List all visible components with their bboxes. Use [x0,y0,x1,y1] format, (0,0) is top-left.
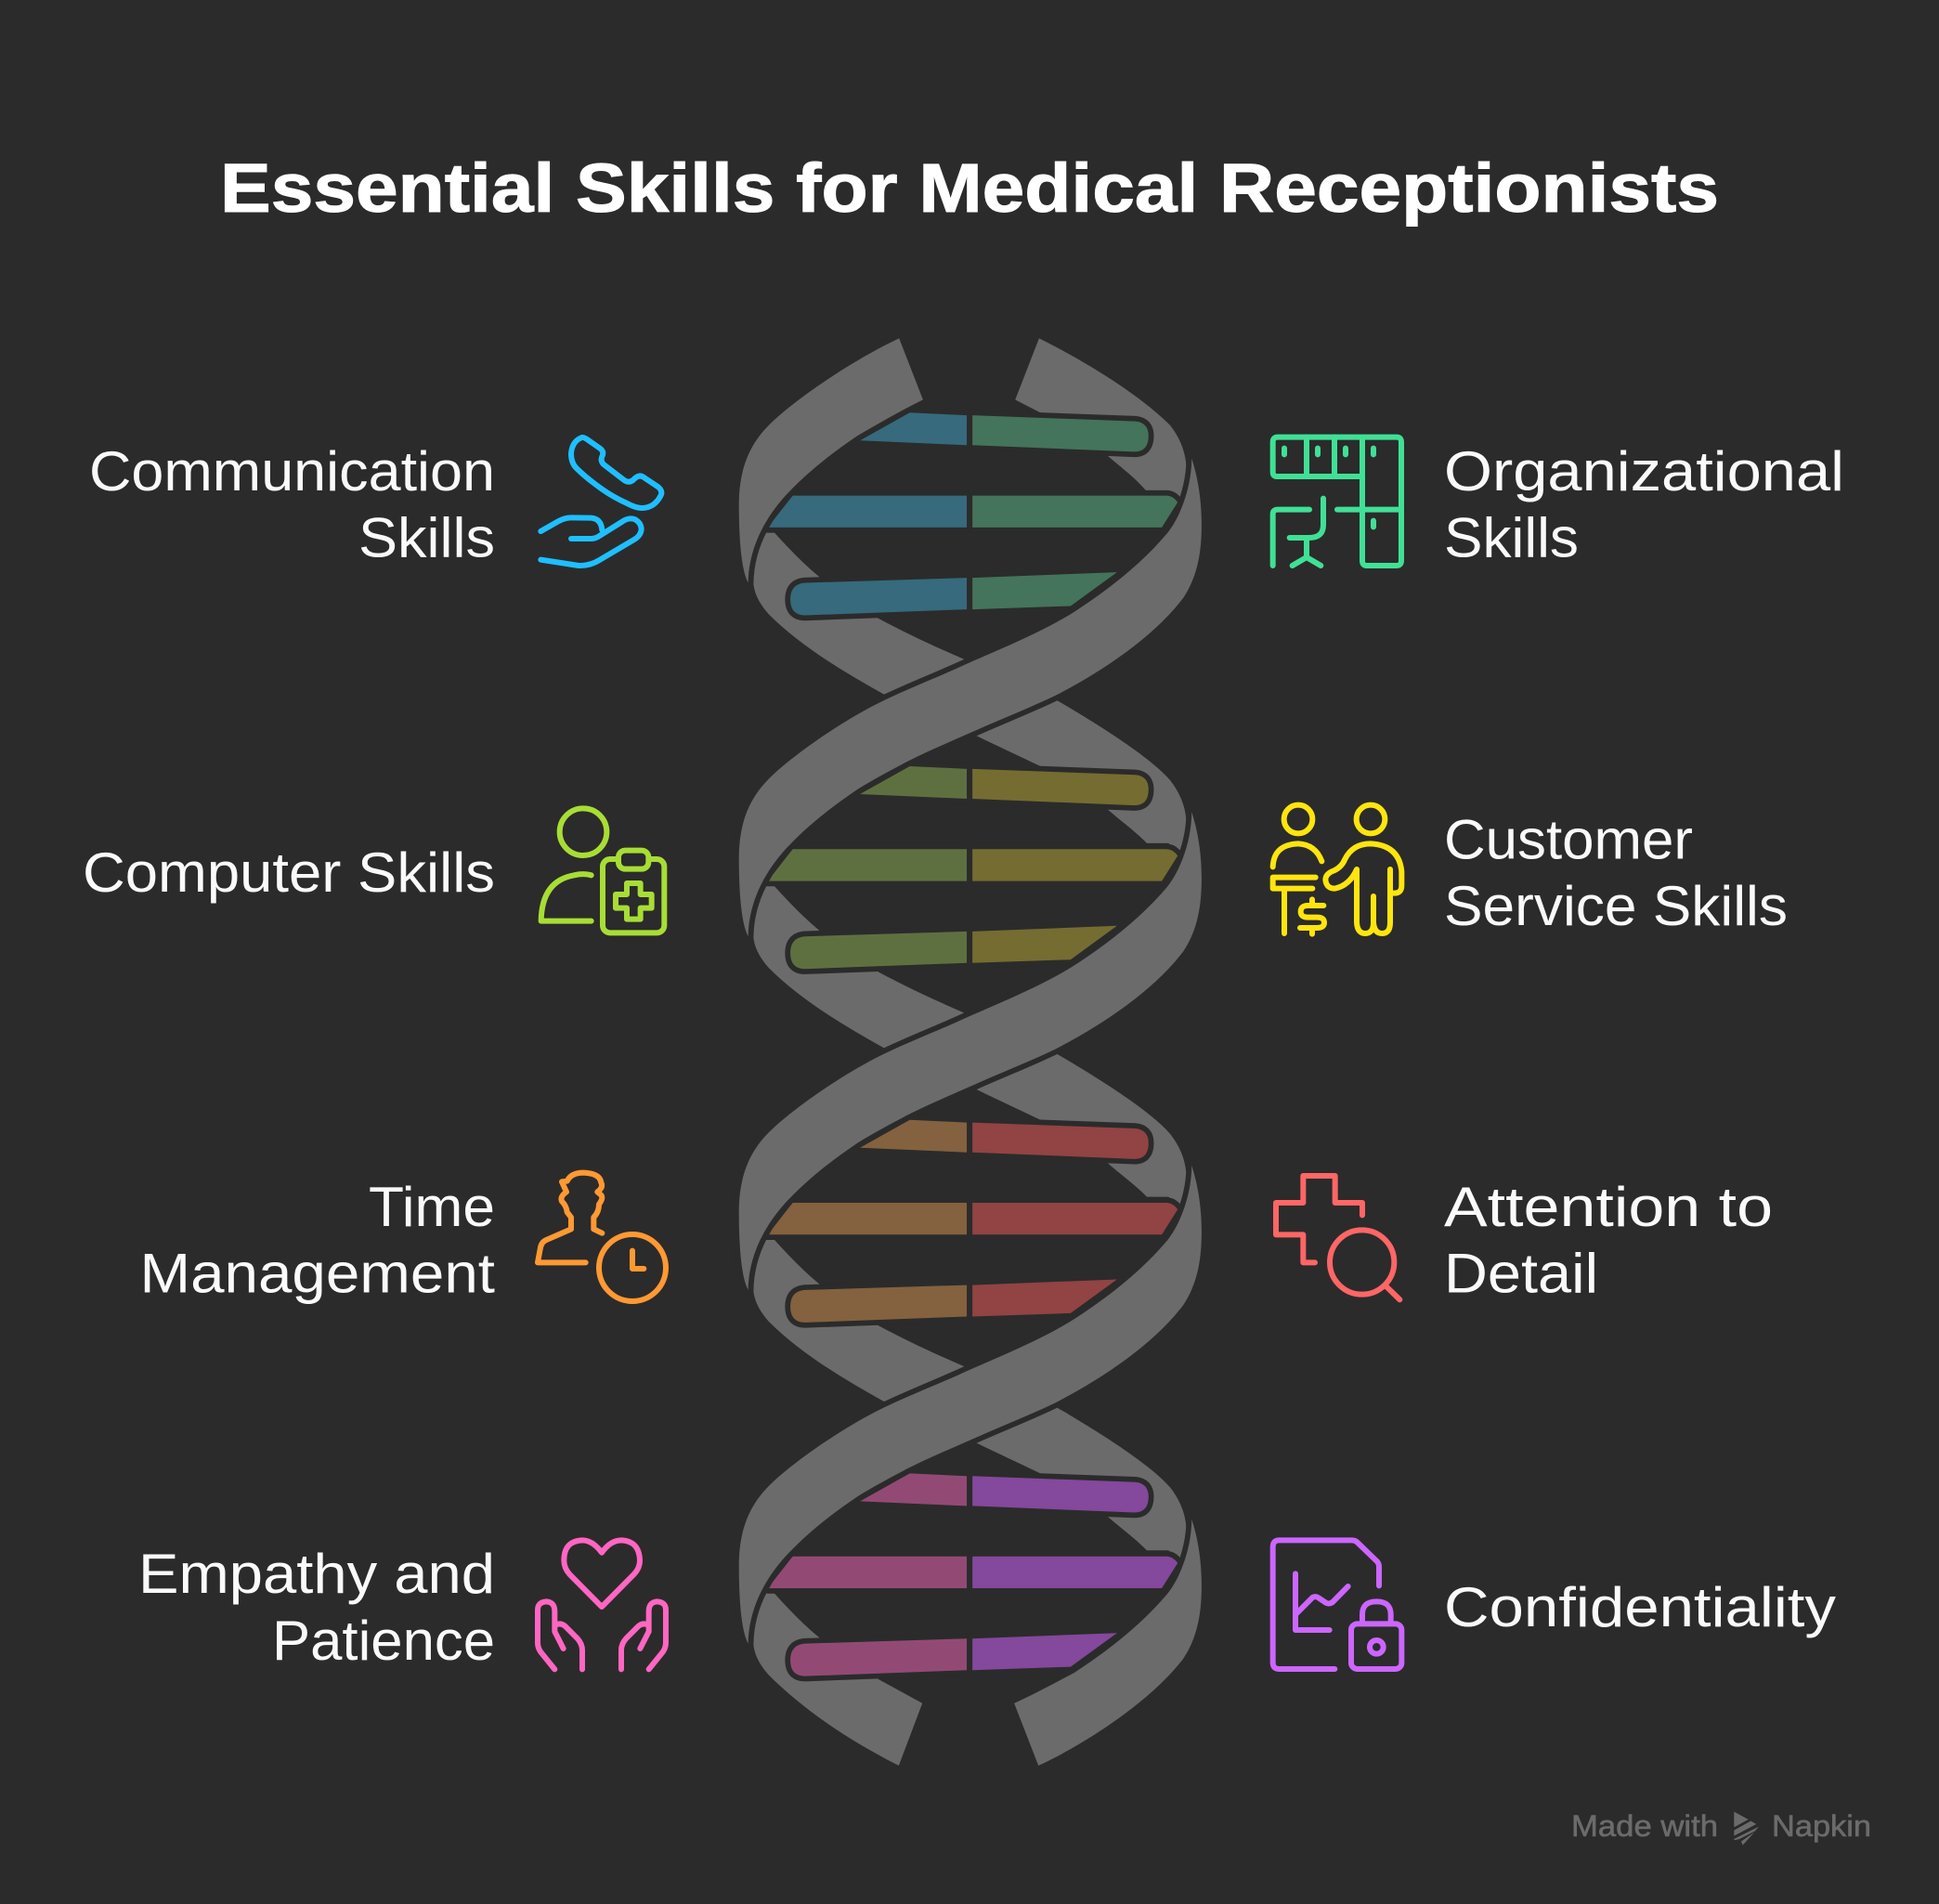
label: confidentiality: Confidentiality [1444,1576,1836,1638]
label: attention to detail: Detail [1444,1243,1598,1304]
back strands [752,338,1187,1766]
icon: office cabinets and chair [1273,437,1401,566]
icon: person with medical clipboard [541,808,664,932]
label: communication skills [89,440,495,568]
watermark: made with napkin: Napkin [1772,1809,1871,1843]
label: communication skills: Skills [358,507,495,568]
label: empathy and patience [138,1543,495,1672]
watermark: made with napkin: Made with [1571,1809,1718,1843]
icon: hands holding heart [538,1540,666,1669]
rungs: computer and customer service [768,766,1178,969]
label: empathy and patience: Empathy and [138,1543,495,1605]
icon: document with chart and lock [1273,1540,1401,1669]
label: communication skills: Communication [89,440,495,502]
dna helix [739,338,1202,1766]
title: Essential Skills for Medical Receptionists [220,150,1719,227]
label: time management: Management [139,1243,495,1304]
label: empathy and patience: Patience [272,1610,495,1672]
label: customer service skills [1444,808,1788,937]
label: attention to detail: Attention to [1444,1176,1773,1238]
label: attention to detail [1444,1176,1773,1304]
label: organizational skills: Skills [1444,507,1579,568]
label: customer service skills: Service Skills [1444,875,1788,937]
icon: person with clock [538,1173,666,1301]
rungs: communication and organizational [768,412,1178,615]
label: organizational skills: Organizational [1444,440,1844,502]
icon: napkin logo [1734,1812,1759,1845]
label: time management [139,1176,495,1304]
label: organizational skills [1444,440,1844,568]
icon: phone over hand [540,437,661,566]
label: time management: Time [369,1176,495,1238]
rungs: empathy and confidentiality [768,1473,1178,1676]
label: computer skills: Computer Skills [83,841,495,904]
watermark: made with napkin [1571,1809,1871,1845]
rungs: time management and attention to detail [768,1120,1178,1323]
icon: medical cross with magnifier [1276,1176,1399,1299]
icon: customer at payment desk [1273,805,1401,934]
label: customer service skills: Customer [1444,808,1693,871]
front strands [739,338,1202,1766]
